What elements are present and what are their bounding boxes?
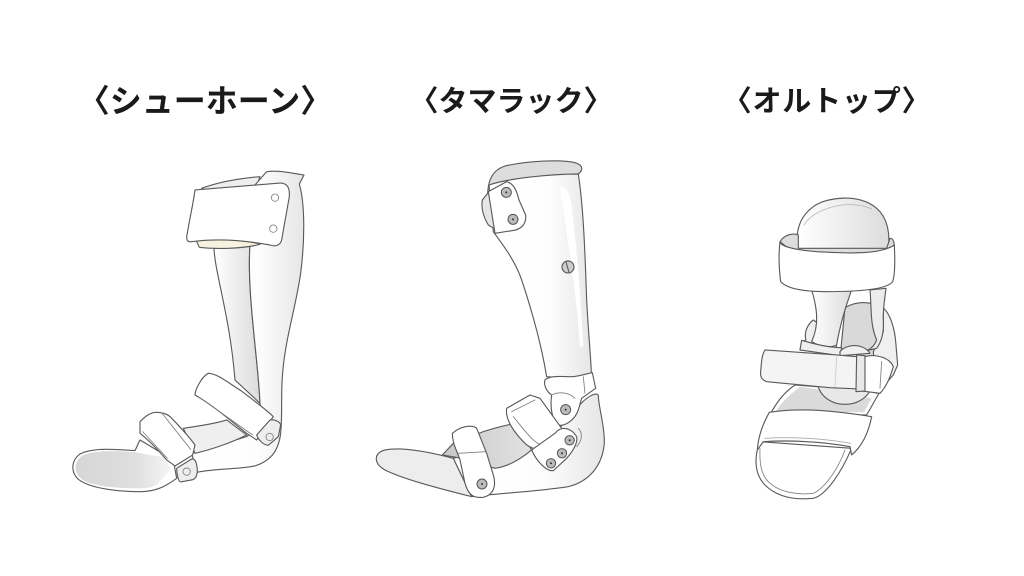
toe strap xyxy=(757,410,872,455)
outer side wing xyxy=(873,308,898,393)
upper strap edge xyxy=(482,192,497,230)
title: shoehorn: 〈シューホーン〉 xyxy=(78,83,332,119)
sole xyxy=(376,449,472,497)
back shell xyxy=(192,171,304,472)
heel shell xyxy=(453,394,604,497)
upper strap xyxy=(195,373,273,440)
ankle hinge xyxy=(545,373,596,425)
cuff strap xyxy=(779,242,895,292)
top opening xyxy=(488,161,582,193)
strap root over strut xyxy=(800,340,842,356)
foot plate rim xyxy=(73,440,177,492)
top rim xyxy=(202,177,260,190)
strap loop tab xyxy=(862,356,893,393)
lower strap xyxy=(140,412,195,466)
right strut xyxy=(867,288,886,351)
ankle tab xyxy=(257,420,281,445)
icon: shoehorn brace xyxy=(73,171,304,492)
foot plate inner xyxy=(76,451,172,488)
cuff back xyxy=(780,234,894,255)
toe plate xyxy=(756,442,852,499)
title: tamarack: 〈タマラック〉 xyxy=(409,85,613,118)
icon: tamarack brace xyxy=(376,161,604,497)
icon: ortop brace xyxy=(756,198,898,499)
toe strap xyxy=(452,426,495,497)
left strut xyxy=(812,290,852,347)
middle strap xyxy=(761,350,858,389)
cuff ivory edge xyxy=(196,239,261,248)
mid band xyxy=(442,423,532,468)
cuff rivets xyxy=(271,194,279,201)
ankle disc xyxy=(818,359,872,404)
toe rivet tab xyxy=(177,459,197,482)
heel rivet plate xyxy=(532,428,577,471)
dome xyxy=(797,198,889,257)
upper foot strap xyxy=(506,395,562,450)
left wing xyxy=(800,320,840,355)
inner calf strut xyxy=(214,245,260,403)
upper rivet plate xyxy=(488,182,526,233)
calf shell xyxy=(489,174,592,380)
back plate xyxy=(840,303,884,393)
mid strut xyxy=(183,420,247,453)
title: ortop: 〈オルトップ〉 xyxy=(723,85,931,118)
lower shell xyxy=(770,385,880,415)
highlight xyxy=(560,187,583,347)
side screw xyxy=(562,261,574,273)
calf cuff xyxy=(187,183,289,246)
